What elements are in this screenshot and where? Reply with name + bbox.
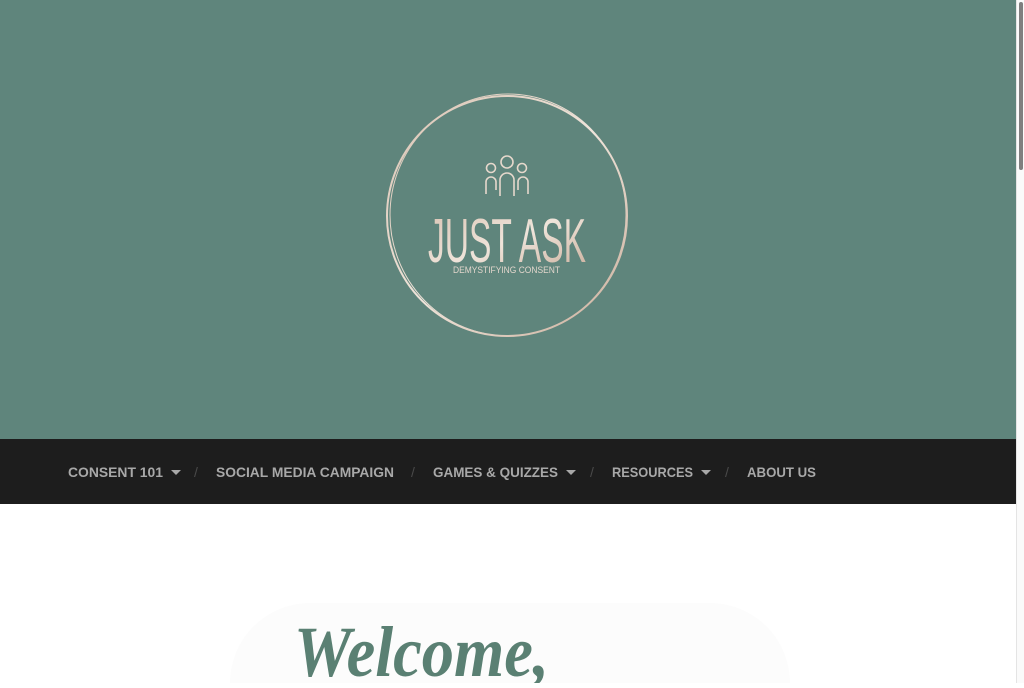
navigation bar: / — [590, 464, 594, 480]
navigation bar: ABOUT US — [747, 464, 816, 480]
navigation bar: / — [725, 464, 729, 480]
navigation bar — [0, 439, 1016, 504]
navigation bar: SOCIAL MEDIA CAMPAIGN — [216, 464, 394, 480]
logo title: JUST ASK — [428, 207, 586, 276]
navigation bar: GAMES & QUIZZES — [433, 464, 558, 480]
header banner — [0, 0, 1016, 439]
logo ring — [387, 94, 627, 336]
navigation bar: / — [411, 464, 415, 480]
scrollbar — [1016, 0, 1024, 683]
logo — [386, 94, 628, 337]
icon: people — [486, 156, 528, 196]
navigation bar: CONSENT 101 — [68, 464, 163, 480]
tagline: DEMYSTIFYING CONSENT — [453, 265, 560, 275]
welcome heading — [230, 603, 790, 683]
navigation bar: / — [194, 464, 198, 480]
navigation bar: RESOURCES — [612, 464, 693, 480]
